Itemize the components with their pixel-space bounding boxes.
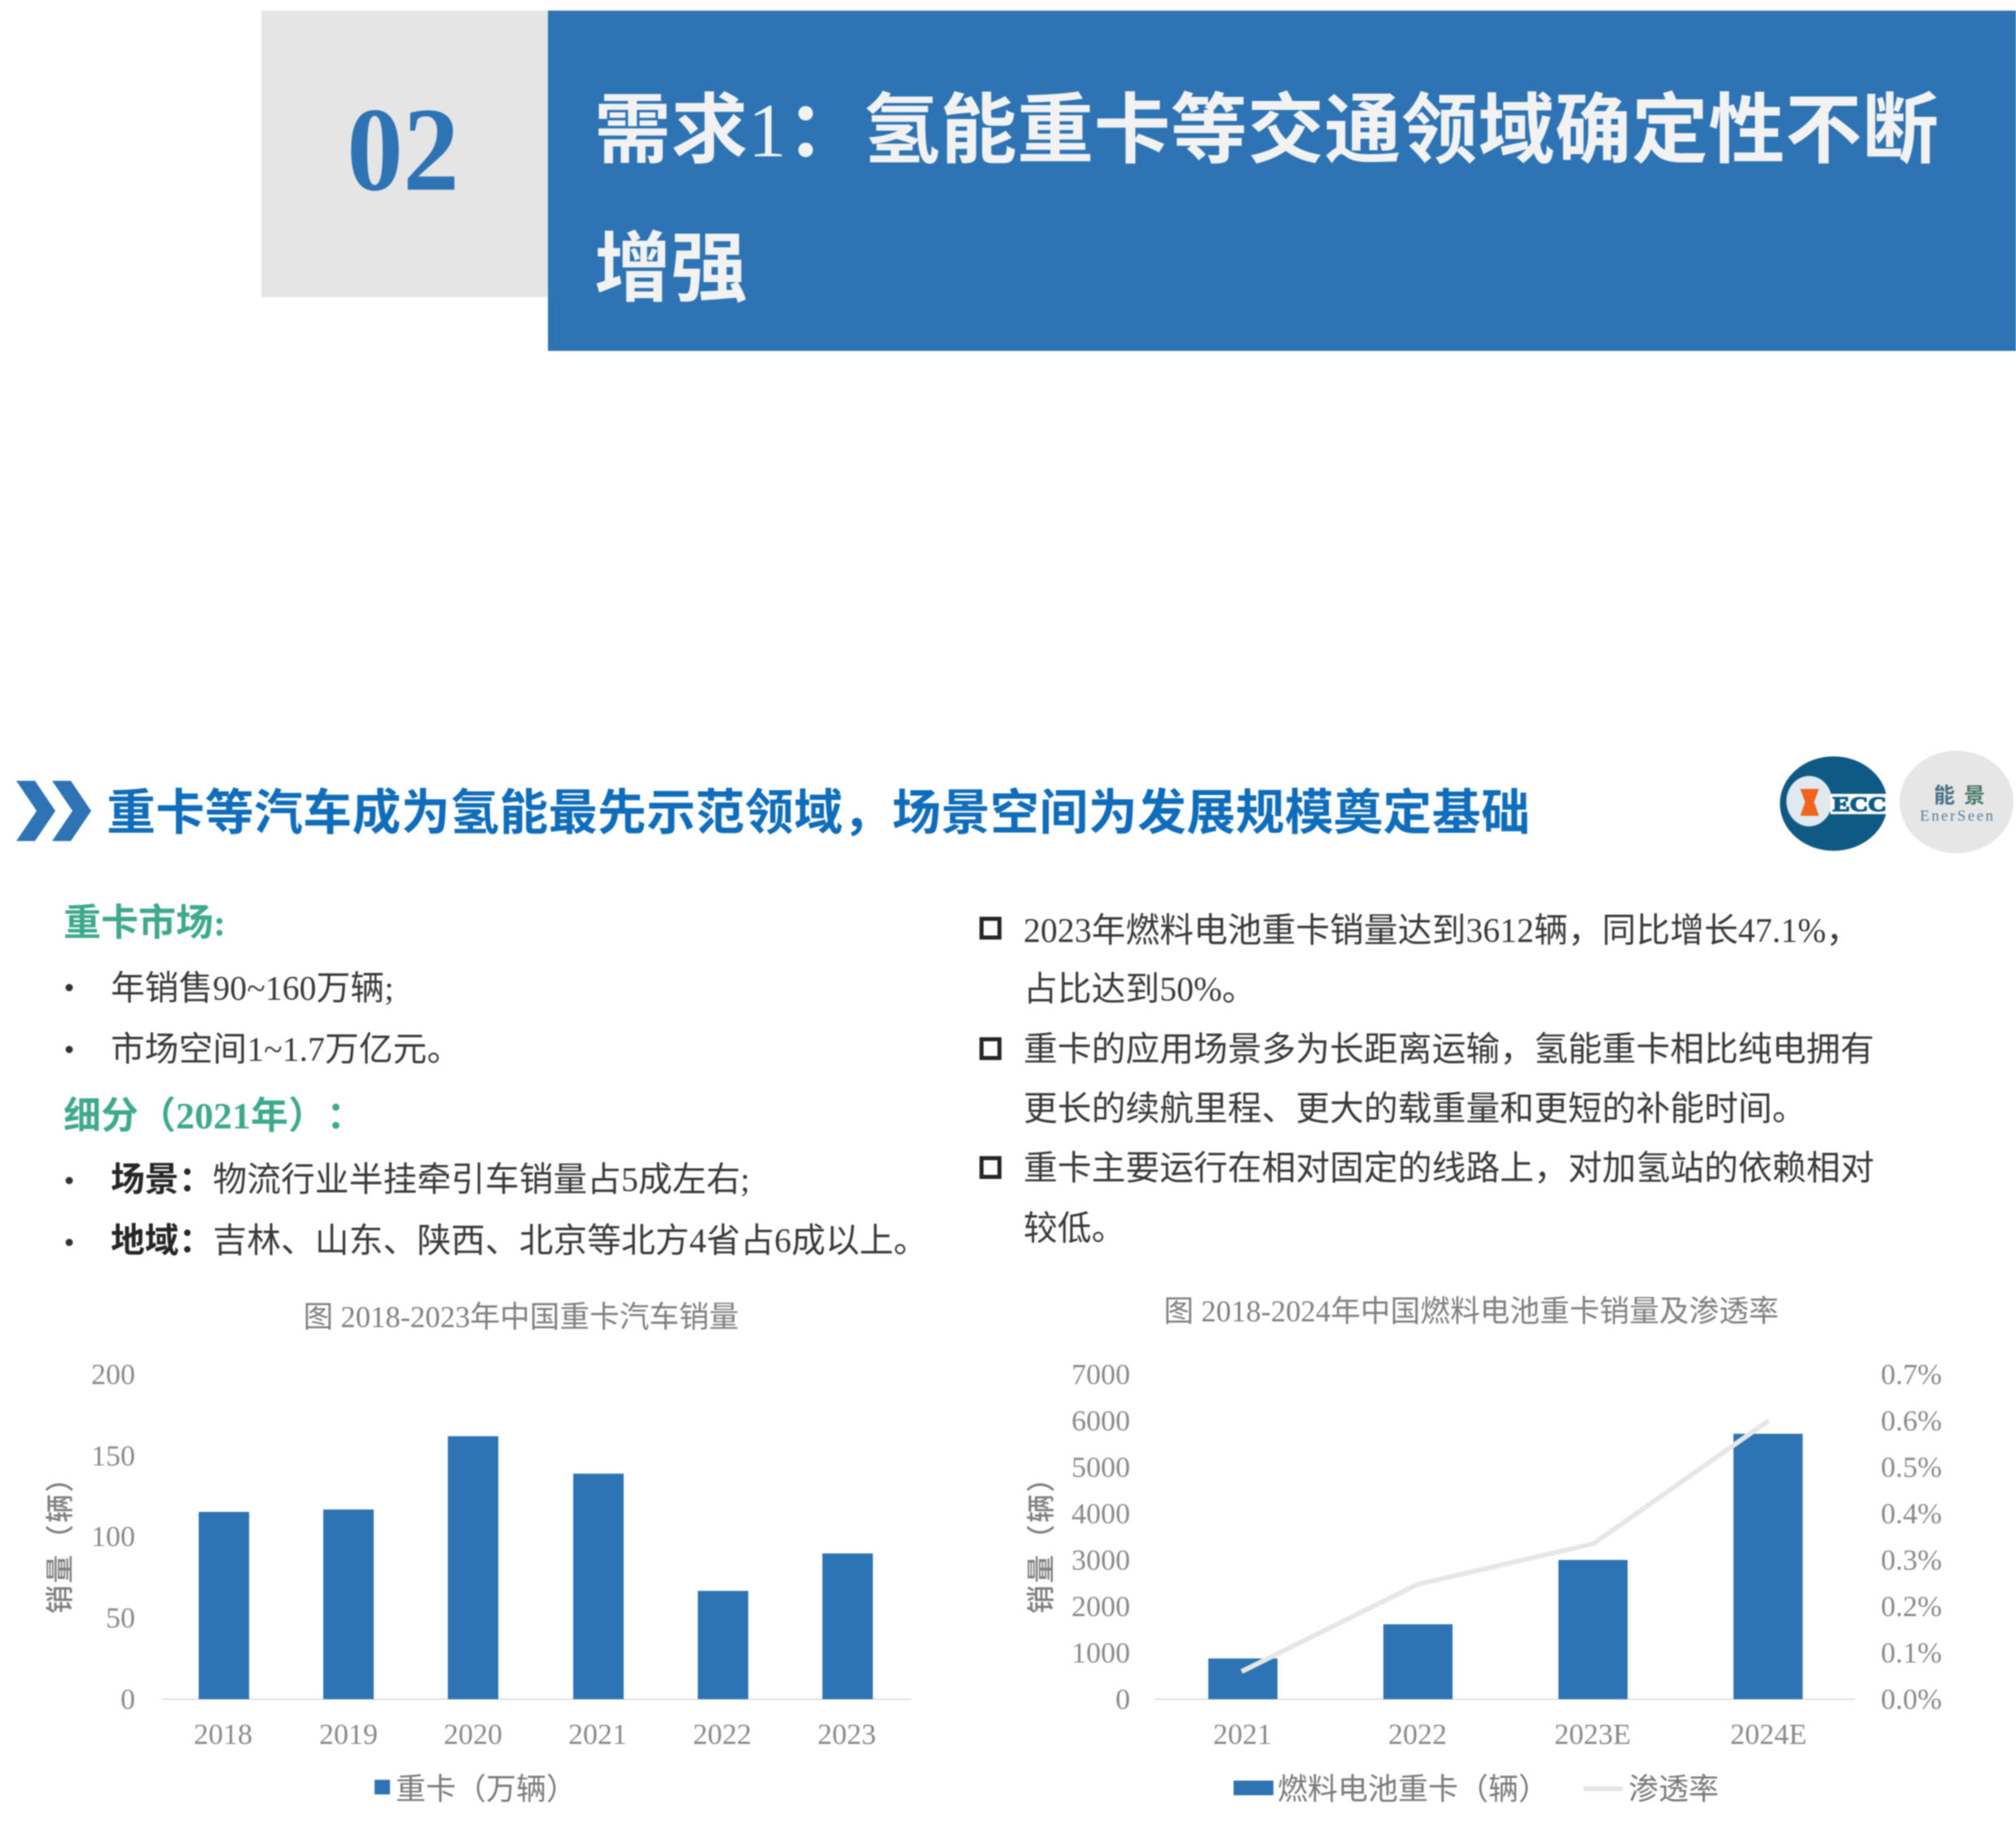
legend: bars: 燃料电池重卡（辆） xyxy=(1278,1772,1549,1807)
y axis labels: 150 xyxy=(91,1439,135,1472)
y axis labels: 0 xyxy=(121,1683,135,1715)
right y axis labels: 0.6% xyxy=(1881,1404,1942,1437)
y axis title: 销量（辆） xyxy=(1026,1464,1058,1614)
left y axis labels: 6000 xyxy=(1072,1404,1130,1437)
x axis labels: 2021 xyxy=(568,1718,627,1750)
point 1: 占比达到50%。 xyxy=(1023,971,1256,1009)
x axis labels: 2023E xyxy=(1554,1718,1631,1750)
bars xyxy=(199,1436,873,1699)
y axis labels: 50 xyxy=(106,1601,135,1634)
point 2: 更长的续航里程、更大的载重量和更短的补能时间。 xyxy=(1023,1090,1806,1128)
point 2 xyxy=(982,1031,1874,1128)
legend: line: 渗透率 xyxy=(1628,1772,1719,1807)
point 3: 重卡主要运行在相对固定的线路上，对加氢站的依赖相对 xyxy=(1023,1150,1874,1188)
subheading: segments: 细分（2021年） ： xyxy=(64,1095,364,1137)
x axis labels: 2019 xyxy=(319,1718,378,1750)
panel: key points xyxy=(982,912,1874,1248)
title text line 2: 增强 xyxy=(594,227,747,312)
left y axis labels: 3000 xyxy=(1072,1544,1130,1576)
right y axis labels: 0.3% xyxy=(1881,1544,1942,1576)
right y axis labels: 0.5% xyxy=(1881,1451,1942,1483)
bullet: region: 地域：吉林、山东、陕西、北京等北方4省占6成以上。 xyxy=(111,1222,927,1260)
icon: double chevron xyxy=(16,781,91,841)
logo: EnerSeen: EnerSeen xyxy=(1920,808,1993,825)
left y axis labels: 0 xyxy=(1115,1683,1130,1715)
x axis labels: 2020 xyxy=(444,1718,502,1750)
logo: ECC xyxy=(1780,756,1888,851)
x axis labels: 2022 xyxy=(693,1718,752,1750)
combo chart: fuel cell heavy truck sales and penetration xyxy=(1026,1295,1942,1807)
subheading: market: 重卡市场: xyxy=(64,902,226,944)
x axis labels: 2023 xyxy=(817,1718,876,1750)
left y axis labels: 2000 xyxy=(1072,1590,1130,1623)
point 3 xyxy=(982,1150,1874,1248)
right y axis labels xyxy=(1881,1358,1942,1715)
right y axis labels: 0.0% xyxy=(1881,1683,1942,1715)
section number: 02 xyxy=(347,83,459,216)
y axis labels: 100 xyxy=(91,1520,135,1553)
y axis labels xyxy=(91,1358,135,1715)
legend: 重卡（万辆） xyxy=(396,1773,576,1807)
x axis labels: 2022 xyxy=(1388,1718,1447,1750)
section number panel xyxy=(261,11,548,297)
bullet: annual sales: 年销售90~160万辆; xyxy=(111,970,394,1008)
logo: EnerSeen xyxy=(1900,751,2014,853)
x axis labels: 2021 xyxy=(1213,1718,1272,1750)
y axis title: 销量（辆） xyxy=(45,1464,77,1614)
left y axis labels: 5000 xyxy=(1072,1451,1130,1483)
chart title: 图 2018-2023年中国重卡汽车销量 xyxy=(303,1300,739,1334)
right y axis labels: 0.2% xyxy=(1881,1590,1942,1623)
left y axis labels: 4000 xyxy=(1072,1497,1130,1530)
left y axis labels: 7000 xyxy=(1072,1358,1130,1391)
title banner xyxy=(548,11,2016,351)
point 1 xyxy=(982,912,1860,1009)
bullet: scenario: 场景：物流行业半挂牵引车销量占5成左右; xyxy=(111,1162,750,1199)
bullet: market size: 市场空间1~1.7万亿元。 xyxy=(111,1031,461,1069)
x axis labels xyxy=(1213,1718,1807,1750)
x axis labels: 2018 xyxy=(194,1718,252,1750)
panel: market text xyxy=(64,902,927,1260)
point 1: 2023年燃料电池重卡销量达到3612辆，同比增长47.1%， xyxy=(1023,912,1860,950)
chart title: 图 2018-2024年中国燃料电池重卡销量及渗透率 xyxy=(1164,1295,1779,1328)
point 3: 较低。 xyxy=(1023,1210,1125,1248)
y axis labels: 200 xyxy=(91,1358,135,1391)
right y axis labels: 0.4% xyxy=(1881,1497,1942,1530)
title text: 需求1：氢能重卡等交通领域确定性不断 xyxy=(594,89,1939,173)
logo: EnerSeen: 能 xyxy=(1934,784,1955,808)
left y axis labels xyxy=(1072,1358,1130,1715)
left y axis labels: 1000 xyxy=(1072,1636,1130,1669)
bar chart: heavy truck sales xyxy=(45,1300,911,1807)
penetration line xyxy=(1242,1421,1768,1671)
section heading: 重卡等汽车成为氢能最先示范领域，场景空间为发展规模奠定基础 xyxy=(107,786,1530,840)
point 2: 重卡的应用场景多为长距离运输，氢能重卡相比纯电拥有 xyxy=(1023,1031,1874,1069)
bars xyxy=(1208,1434,1803,1699)
logo: EnerSeen: 景 xyxy=(1964,784,1985,808)
x axis labels: 2024E xyxy=(1730,1718,1807,1750)
x axis labels xyxy=(194,1718,876,1750)
right y axis labels: 0.1% xyxy=(1881,1636,1942,1669)
logo: ECC: ECC xyxy=(1833,794,1887,816)
right y axis labels: 0.7% xyxy=(1881,1358,1942,1391)
